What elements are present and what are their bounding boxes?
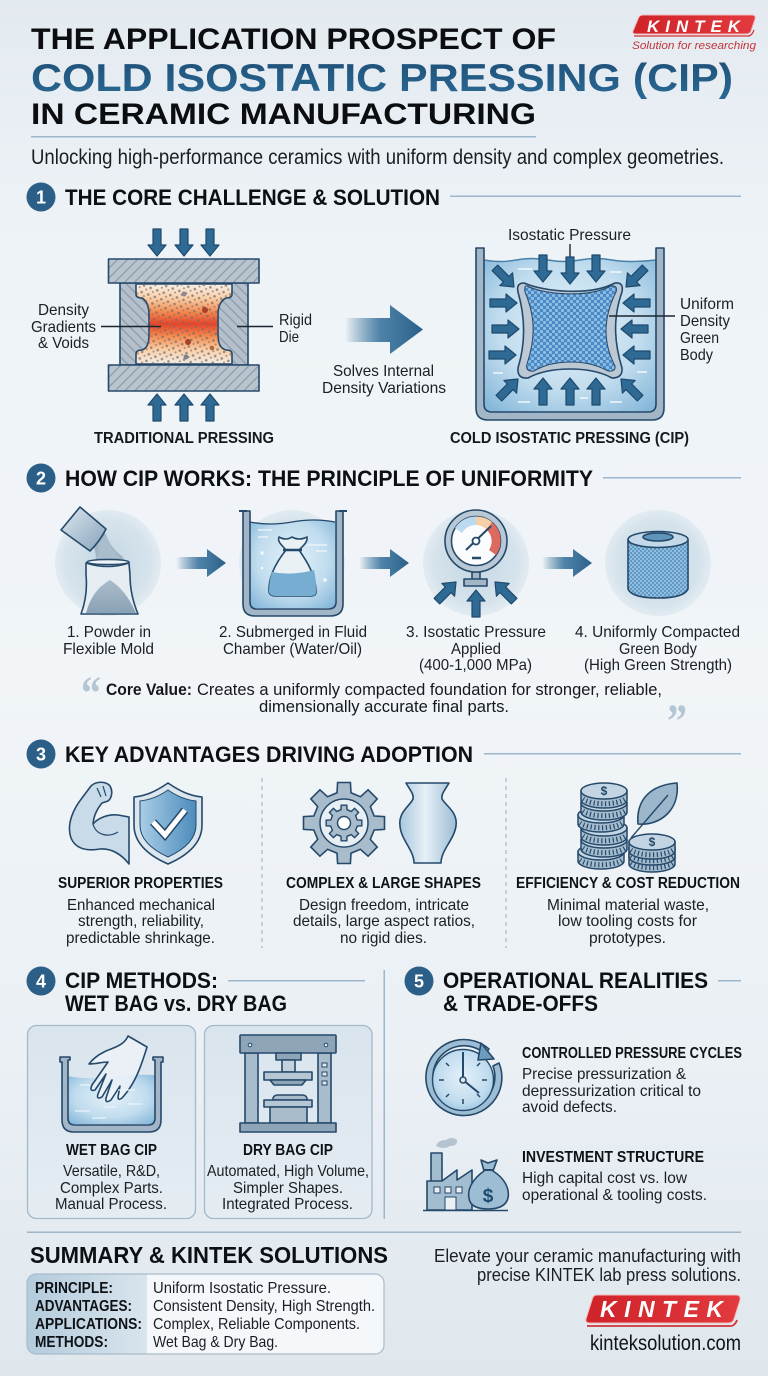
- label: Chamber (Water/Oil): [223, 641, 362, 658]
- callout: core value: Core Value:: [106, 680, 192, 699]
- section 3 heading: KEY ADVANTAGES DRIVING ADOPTION: [65, 742, 473, 767]
- icon: leaf: [631, 783, 677, 838]
- icon: compacted cylinder: [628, 540, 688, 598]
- body text: Enhanced mechanical: [67, 897, 215, 914]
- step 2: submerged in fluid chamber: [219, 510, 367, 658]
- label: rigid die: [237, 312, 312, 346]
- icon: flexed arm: [69, 782, 129, 864]
- label: density gradients: & Voids: [38, 335, 89, 352]
- heading: WET BAG CIP: [66, 1142, 157, 1159]
- icon: coin stack: $: [601, 784, 608, 798]
- body text: details, large aspect ratios,: [293, 913, 475, 930]
- label: [406, 624, 546, 674]
- body text: High capital cost vs. low: [522, 1170, 687, 1187]
- body text: operational & tooling costs.: [522, 1187, 707, 1204]
- icon: small coins: [629, 834, 675, 872]
- item: investment structure: [423, 1138, 707, 1210]
- body text: Integrated Process.: [222, 1196, 353, 1213]
- icon: wet bag tank with hand: [60, 1036, 163, 1132]
- caption: COLD ISOSTATIC PRESSING (CIP): [450, 430, 689, 447]
- section 5 heading: & TRADE-OFFS: [443, 991, 598, 1016]
- label: (400-1,000 MPa): [419, 657, 532, 674]
- body text: [66, 897, 215, 947]
- row labels: METHODS:: [35, 1334, 108, 1351]
- callout: core value: Creates a uniformly compacted foundation for stronger, reliable,: [197, 680, 662, 699]
- icon: pressure arrows: [431, 576, 520, 617]
- diagram: traditional pressing: [31, 229, 312, 447]
- water: [484, 258, 656, 412]
- icon: sealed bag: [269, 537, 316, 596]
- panel: efficiency and cost reduction: [516, 783, 740, 947]
- row labels: ADVANTAGES:: [35, 1298, 132, 1315]
- label: uniform density green body: Body: [680, 347, 713, 364]
- icon: powder pile: [86, 580, 136, 613]
- body text: [522, 1170, 707, 1204]
- title: THE APPLICATION PROSPECT OF: [31, 23, 556, 56]
- body text: [293, 897, 475, 947]
- section 5 heading: [404, 966, 708, 1016]
- green body in flexible mold: [518, 283, 622, 378]
- section 2 heading: 2: [36, 468, 46, 488]
- row labels: APPLICATIONS:: [35, 1316, 142, 1333]
- section 1 heading: 1: [36, 188, 46, 208]
- callout: core value: ”: [667, 695, 687, 748]
- press arrows: [148, 229, 219, 421]
- section 4 heading: 4: [36, 972, 46, 992]
- body text: [522, 1066, 701, 1116]
- rigid die: [120, 283, 248, 365]
- panel: complex and large shapes: [286, 782, 481, 947]
- callout: core value: dimensionally accurate final parts.: [259, 697, 509, 716]
- body text: Simpler Shapes.: [233, 1180, 343, 1197]
- body text: [207, 1163, 369, 1213]
- icon: vase: [400, 783, 456, 863]
- callout: core value: [81, 667, 687, 748]
- powder cavity with density gradient: [136, 284, 232, 364]
- body text: prototypes.: [589, 930, 666, 947]
- icon: factory and money bag: [423, 1138, 508, 1210]
- row labels: [35, 1280, 142, 1351]
- icon: pouring cup: [61, 507, 106, 551]
- heading: SUPERIOR PROPERTIES: [58, 875, 223, 892]
- label: rigid die: Die: [279, 329, 299, 346]
- body text: [547, 897, 709, 947]
- body text: Versatile, R&D,: [63, 1163, 160, 1180]
- body text: [55, 1163, 167, 1213]
- arrow: solves internal density variations: Density Variations: [322, 380, 446, 397]
- arrow: step 2 to 3: [359, 549, 409, 577]
- row values: Complex, Reliable Components.: [153, 1316, 360, 1333]
- diagram: cold isostatic pressing: [450, 227, 734, 447]
- icon: coin stack: [578, 783, 627, 869]
- section 4 heading: CIP METHODS:: [65, 968, 218, 993]
- call to action: [434, 1246, 741, 1285]
- icon: shield with check: [134, 783, 202, 864]
- arrow: solves internal density variations: Solves Internal: [333, 363, 434, 380]
- panel: superior properties: [58, 782, 223, 947]
- body text: Complex Parts.: [60, 1180, 163, 1197]
- call to action: precise KINTEK lab press solutions.: [477, 1265, 741, 1285]
- body text: no rigid dies.: [340, 930, 427, 947]
- label: [219, 624, 367, 658]
- label: density gradients: Gradients: [31, 319, 96, 336]
- row labels: PRINCIPLE:: [35, 1280, 113, 1297]
- section 1 heading: THE CORE CHALLENGE & SOLUTION: [65, 185, 440, 210]
- label: Green Body: [619, 641, 697, 658]
- body text: Automated, High Volume,: [207, 1163, 369, 1180]
- summary heading: SUMMARY & KINTEK SOLUTIONS: [30, 1242, 388, 1268]
- label: uniform density green body: Density: [680, 313, 730, 330]
- title: COLD ISOSTATIC PRESSING (CIP): [31, 57, 733, 100]
- call to action: Elevate your ceramic manufacturing with: [434, 1246, 741, 1266]
- label: isostatic pressure: [508, 227, 631, 262]
- icon: pressure gauge: [445, 510, 507, 586]
- body text: strength, reliability,: [78, 913, 204, 930]
- logo: KINTEK bottom: [586, 1295, 740, 1326]
- body text: avoid defects.: [522, 1099, 617, 1116]
- title: [31, 23, 733, 131]
- top and bottom plates: [108, 259, 259, 391]
- body text: predictable shrinkage.: [66, 930, 215, 947]
- body text: Precise pressurization &: [522, 1066, 686, 1083]
- label: 2. Submerged in Fluid: [219, 624, 367, 641]
- arrow: solves internal density variations: [322, 305, 446, 397]
- row values: Wet Bag & Dry Bag.: [153, 1334, 278, 1351]
- heading: COMPLEX & LARGE SHAPES: [286, 875, 481, 892]
- panel: wet bag CIP: [28, 1026, 196, 1218]
- section 3 heading: 3: [36, 744, 46, 764]
- label: rigid die: Rigid: [279, 312, 312, 329]
- icon: fluid chamber: [250, 520, 335, 608]
- step 3: isostatic pressure applied: [406, 510, 546, 674]
- label: 4. Uniformly Compacted: [575, 624, 740, 641]
- heading: INVESTMENT STRUCTURE: [522, 1149, 704, 1166]
- callout: core value: “: [81, 667, 101, 720]
- label: 3. Isostatic Pressure: [406, 624, 546, 641]
- arrow: step 3 to 4: [542, 549, 592, 577]
- label: 1. Powder in: [67, 624, 151, 641]
- label: density gradients: [31, 302, 161, 352]
- label: [63, 624, 154, 658]
- logo: KINTEK top: Solution for researching: [632, 40, 757, 52]
- body text: Minimal material waste,: [547, 897, 709, 914]
- step 1: powder in flexible mold: [55, 507, 161, 658]
- row values: Uniform Isostatic Pressure.: [153, 1280, 331, 1297]
- summary table: [27, 1274, 384, 1354]
- icon: gear: [304, 782, 384, 864]
- row values: [153, 1280, 375, 1351]
- icon: small coins: $: [649, 835, 656, 849]
- icon: flexible bag: [81, 563, 138, 614]
- tank walls: [476, 248, 664, 420]
- label: Applied: [451, 641, 501, 658]
- label: uniform density green body: Green: [680, 330, 719, 347]
- website: kinteksolution.com: [590, 1332, 741, 1355]
- icon: press machine: [240, 1035, 336, 1132]
- label: (High Green Strength): [584, 657, 732, 674]
- icon: factory and money bag: $: [483, 1186, 494, 1207]
- label: uniform density green body: Uniform: [680, 296, 734, 313]
- item: controlled pressure cycles: [426, 1040, 742, 1116]
- heading: DRY BAG CIP: [243, 1142, 333, 1159]
- label: density gradients: Density: [38, 302, 89, 319]
- logo: KINTEK top: [632, 15, 757, 52]
- arrow: step 1 to 2: [176, 549, 226, 577]
- panel: dry bag CIP: [204, 1026, 372, 1218]
- row values: Consistent Density, High Strength.: [153, 1298, 375, 1315]
- section 2 heading: HOW CIP WORKS: THE PRINCIPLE OF UNIFORMITY: [65, 466, 593, 491]
- caption: TRADITIONAL PRESSING: [94, 430, 274, 447]
- body text: depressurization critical to: [522, 1083, 701, 1100]
- label: uniform density green body: [609, 296, 734, 364]
- logo: KINTEK top: KINTEK: [647, 17, 742, 36]
- label: [575, 624, 740, 674]
- body text: Manual Process.: [55, 1196, 167, 1213]
- section 4 heading: WET BAG vs. DRY BAG: [65, 991, 287, 1016]
- logo: KINTEK bottom: KINTEK: [600, 1296, 724, 1322]
- icon: clock with cycle arrow: [426, 1040, 502, 1116]
- section 5 heading: 5: [414, 972, 424, 992]
- section 5 heading: OPERATIONAL REALITIES: [443, 968, 708, 993]
- body text: low tooling costs for: [558, 913, 698, 930]
- body text: Design freedom, intricate: [299, 897, 469, 914]
- label: Flexible Mold: [63, 641, 154, 658]
- section 4 heading: [26, 966, 287, 1016]
- title: IN CERAMIC MANUFACTURING: [31, 98, 536, 131]
- pressure arrows: [489, 255, 651, 405]
- label: isostatic pressure: Isostatic Pressure: [508, 227, 631, 244]
- icon: powder stream: [90, 530, 127, 564]
- heading: EFFICIENCY & COST REDUCTION: [516, 875, 740, 892]
- step 4: uniformly compacted green body: [575, 510, 740, 674]
